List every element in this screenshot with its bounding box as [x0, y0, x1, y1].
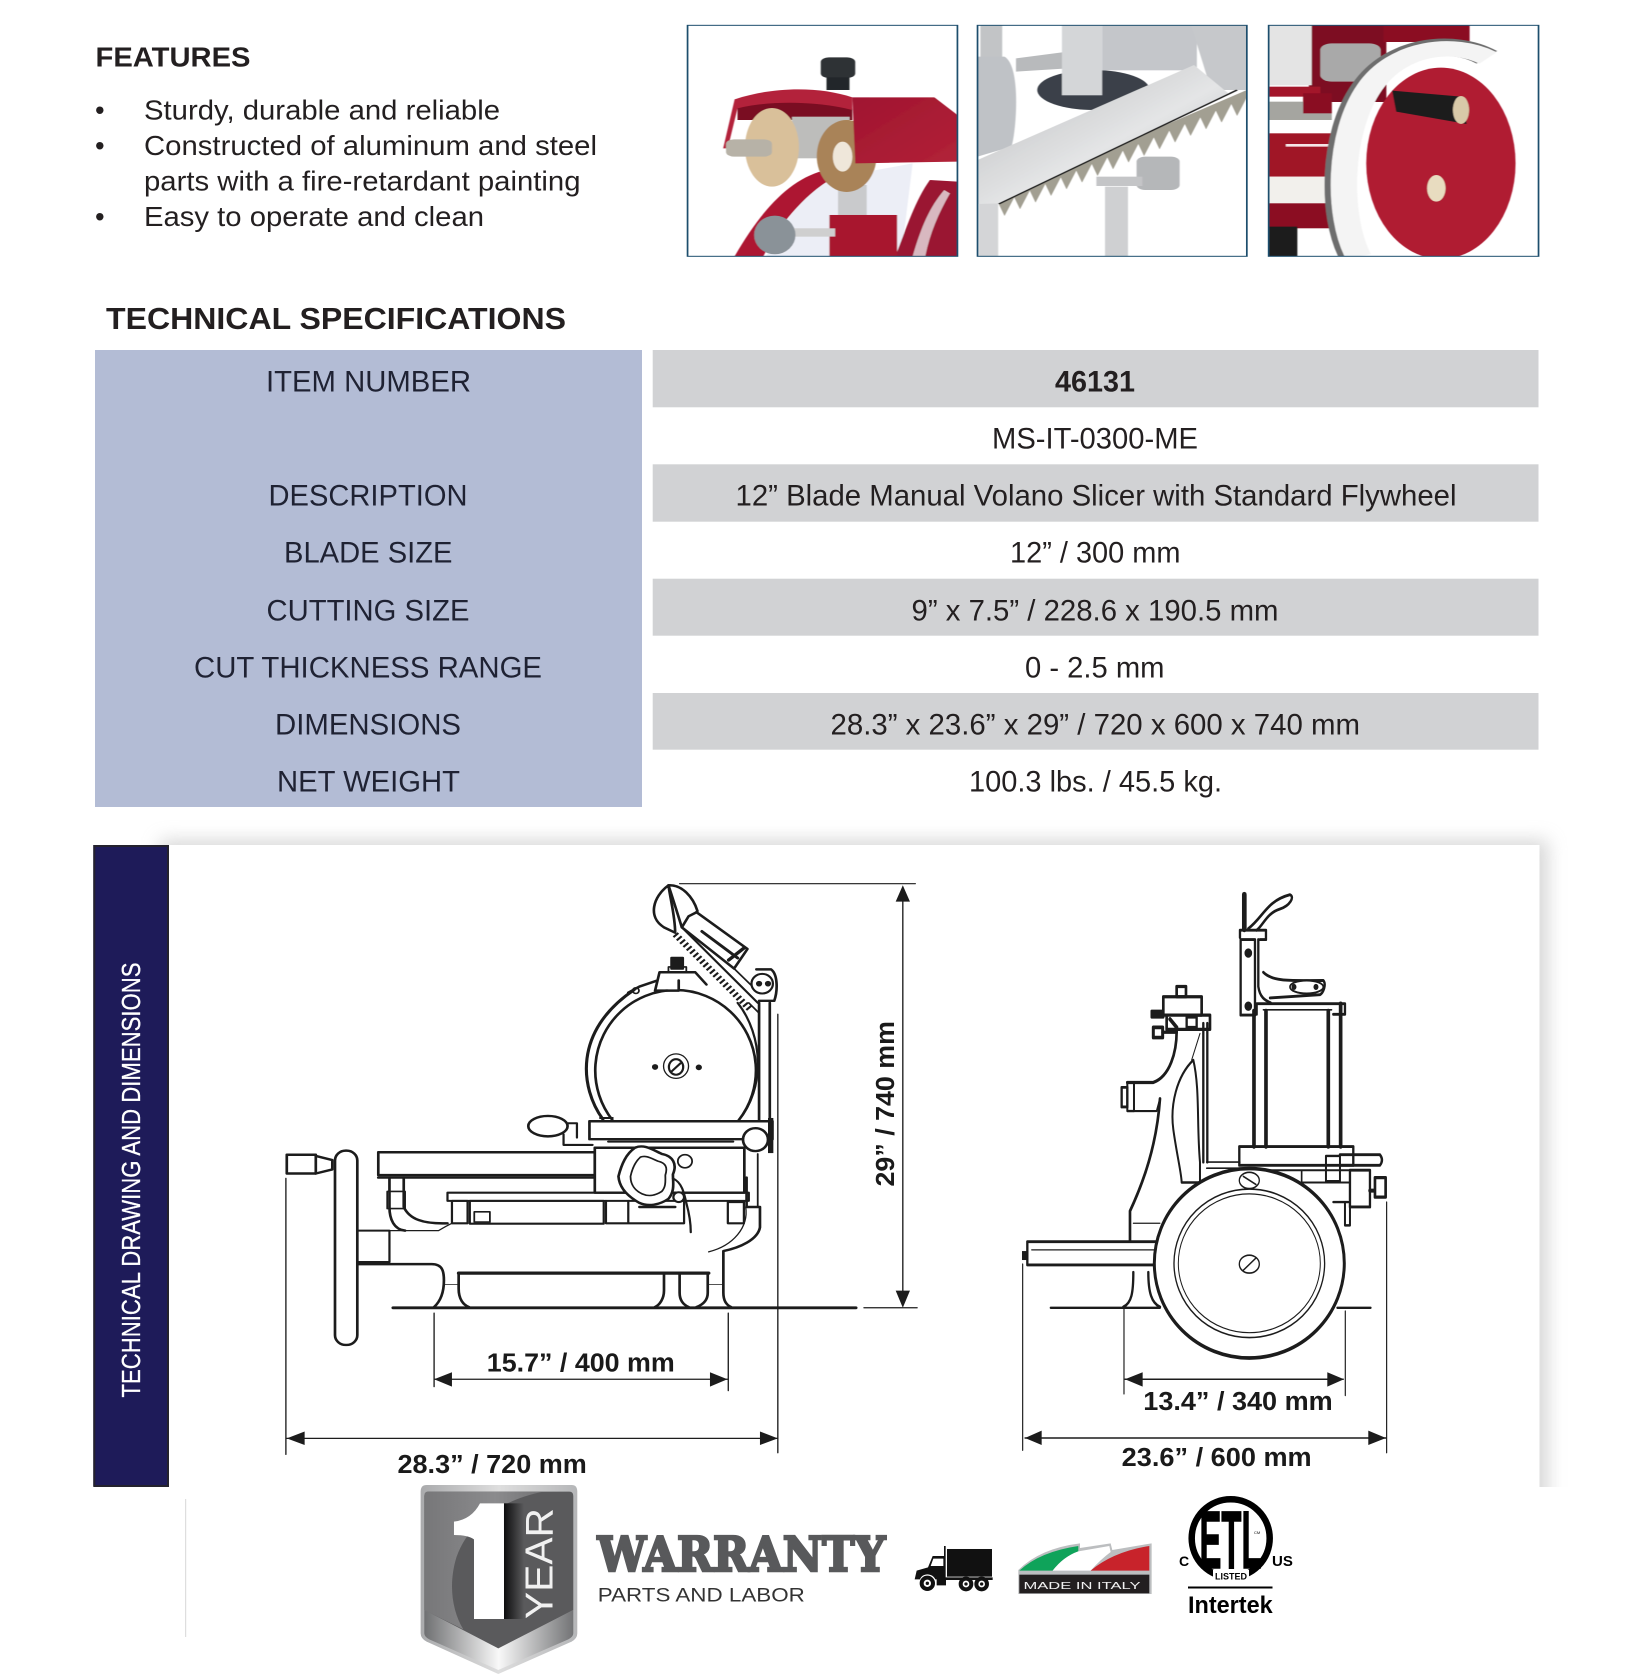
- dimension lines side view: [286, 884, 917, 1454]
- ground and foot: [1051, 1272, 1371, 1308]
- photo: sharpener detail: [688, 25, 957, 256]
- badge numeral: 1: [440, 1474, 529, 1653]
- thin vertical rule: [185, 1499, 186, 1637]
- dimension lines front view: [1023, 1202, 1387, 1453]
- heading: features: FEATURES: [96, 42, 250, 73]
- panel: specification values: MS-IT-0300-ME: [992, 422, 1198, 455]
- features bullet list: [95, 94, 597, 232]
- features bullet list: Easy to operate and clean: [144, 201, 484, 232]
- panel: specification values: 12” Blade Manual Volano Slicer with Standard Flywheel: [736, 480, 1456, 513]
- blade and guard: [586, 958, 758, 1120]
- dimension labels: side view: 15.7” / 400 mm: [487, 1349, 675, 1377]
- heading: technical specifications: TECHNICAL SPECIFICATIONS: [106, 301, 566, 336]
- icon: ETL listed Intertek mark: C: [1179, 1553, 1189, 1569]
- icon: ETL listed Intertek mark: CM: [1254, 1530, 1260, 1535]
- icon: delivery truck: [915, 1546, 993, 1591]
- panel: specification values: 12” / 300 mm: [1010, 537, 1180, 570]
- panel: specification labels: NET WEIGHT: [277, 766, 460, 799]
- panel: specification labels: [95, 350, 642, 807]
- features bullet list: •: [95, 201, 105, 232]
- base legs and elbows: [387, 1154, 856, 1308]
- photo: flywheel detail: [1269, 25, 1539, 259]
- uprights and top frame: [1254, 1004, 1345, 1147]
- top plate and handle: [528, 1116, 773, 1153]
- icon: ETL listed Intertek mark: Intertek: [1188, 1592, 1273, 1619]
- panel: specification values: 28.3” x 23.6” x 29” / 720 x 600 x 740 mm: [830, 709, 1360, 742]
- panel: drawing card shadow: [160, 840, 1548, 1530]
- features bullet list: Sturdy, durable and reliable: [144, 94, 500, 126]
- panel: specification values: 100.3 lbs. / 45.5 kg.: [969, 766, 1222, 799]
- sharpener head: [1152, 987, 1210, 1038]
- panel: specification labels: DIMENSIONS: [275, 709, 461, 742]
- carriage table and knob: [378, 1146, 749, 1232]
- dimension labels: side view: 28.3” / 720 mm: [398, 1451, 587, 1479]
- icon: one year warranty badge: [421, 1474, 577, 1674]
- features bullet list: •: [95, 130, 105, 161]
- panel: specification labels: BLADE SIZE: [284, 537, 452, 570]
- panel: specification labels: CUTTING SIZE: [266, 595, 470, 628]
- panel: specification values: 0 - 2.5 mm: [1025, 651, 1164, 684]
- slide rail: [1022, 1242, 1158, 1265]
- panel: specification values: [653, 350, 1538, 799]
- sidebar: technical drawing and dimensions: [93, 845, 169, 1486]
- badge stem: [474, 1530, 504, 1619]
- badge year label: YEAR: [519, 1508, 562, 1619]
- dimension labels: front view: 23.6” / 600 mm: [1122, 1444, 1312, 1472]
- technical drawing: front view: [1022, 895, 1387, 1453]
- panel: specification labels: DESCRIPTION: [268, 480, 468, 513]
- dimension labels: front view: 13.4” / 340 mm: [1143, 1388, 1333, 1416]
- flywheel face: [1154, 1169, 1344, 1358]
- dimension labels: side view: [398, 1021, 900, 1479]
- photo: serrated guide detail: [978, 25, 1247, 257]
- features bullet list: parts with a fire-retardant painting: [144, 166, 580, 196]
- icon: ETL listed Intertek mark: [1179, 1495, 1293, 1619]
- dimension labels: front view: [1122, 1388, 1333, 1472]
- warranty subline: PARTS AND LABOR: [598, 1586, 805, 1607]
- sidebar: technical drawing and dimensions: TECHNICAL DRAWING AND DIMENSIONS: [116, 962, 146, 1398]
- column and nose: [1122, 1023, 1207, 1242]
- icon: ETL listed Intertek mark: LISTED: [1215, 1572, 1247, 1582]
- icon: made in italy flag: [1018, 1543, 1152, 1594]
- icon: ETL listed Intertek mark: US: [1272, 1553, 1293, 1570]
- panel: specification values: 46131: [1055, 366, 1135, 399]
- icon: made in italy flag: MADE IN ITALY: [1024, 1580, 1140, 1592]
- panel: specification labels: CUT THICKNESS RANGE: [194, 651, 542, 684]
- flywheel edge and crank: [287, 1151, 452, 1345]
- technical drawing: side view: [286, 884, 917, 1454]
- base block and clamp: [1207, 1147, 1386, 1225]
- dimension labels: side view: 29” / 740 mm: [872, 1021, 900, 1186]
- sharpener arm: [654, 885, 777, 1121]
- panel: specification labels: ITEM NUMBER: [266, 366, 471, 399]
- sharpener handle side: [1240, 895, 1325, 1015]
- features bullet list: Constructed of aluminum and steel: [144, 130, 597, 161]
- icon: ETL listed Intertek mark: ETL: [1200, 1495, 1262, 1586]
- features bullet list: •: [95, 94, 105, 126]
- warranty wordmark: WARRANTY: [597, 1527, 886, 1583]
- panel: specification values: 9” x 7.5” / 228.6 x 190.5 mm: [912, 595, 1278, 628]
